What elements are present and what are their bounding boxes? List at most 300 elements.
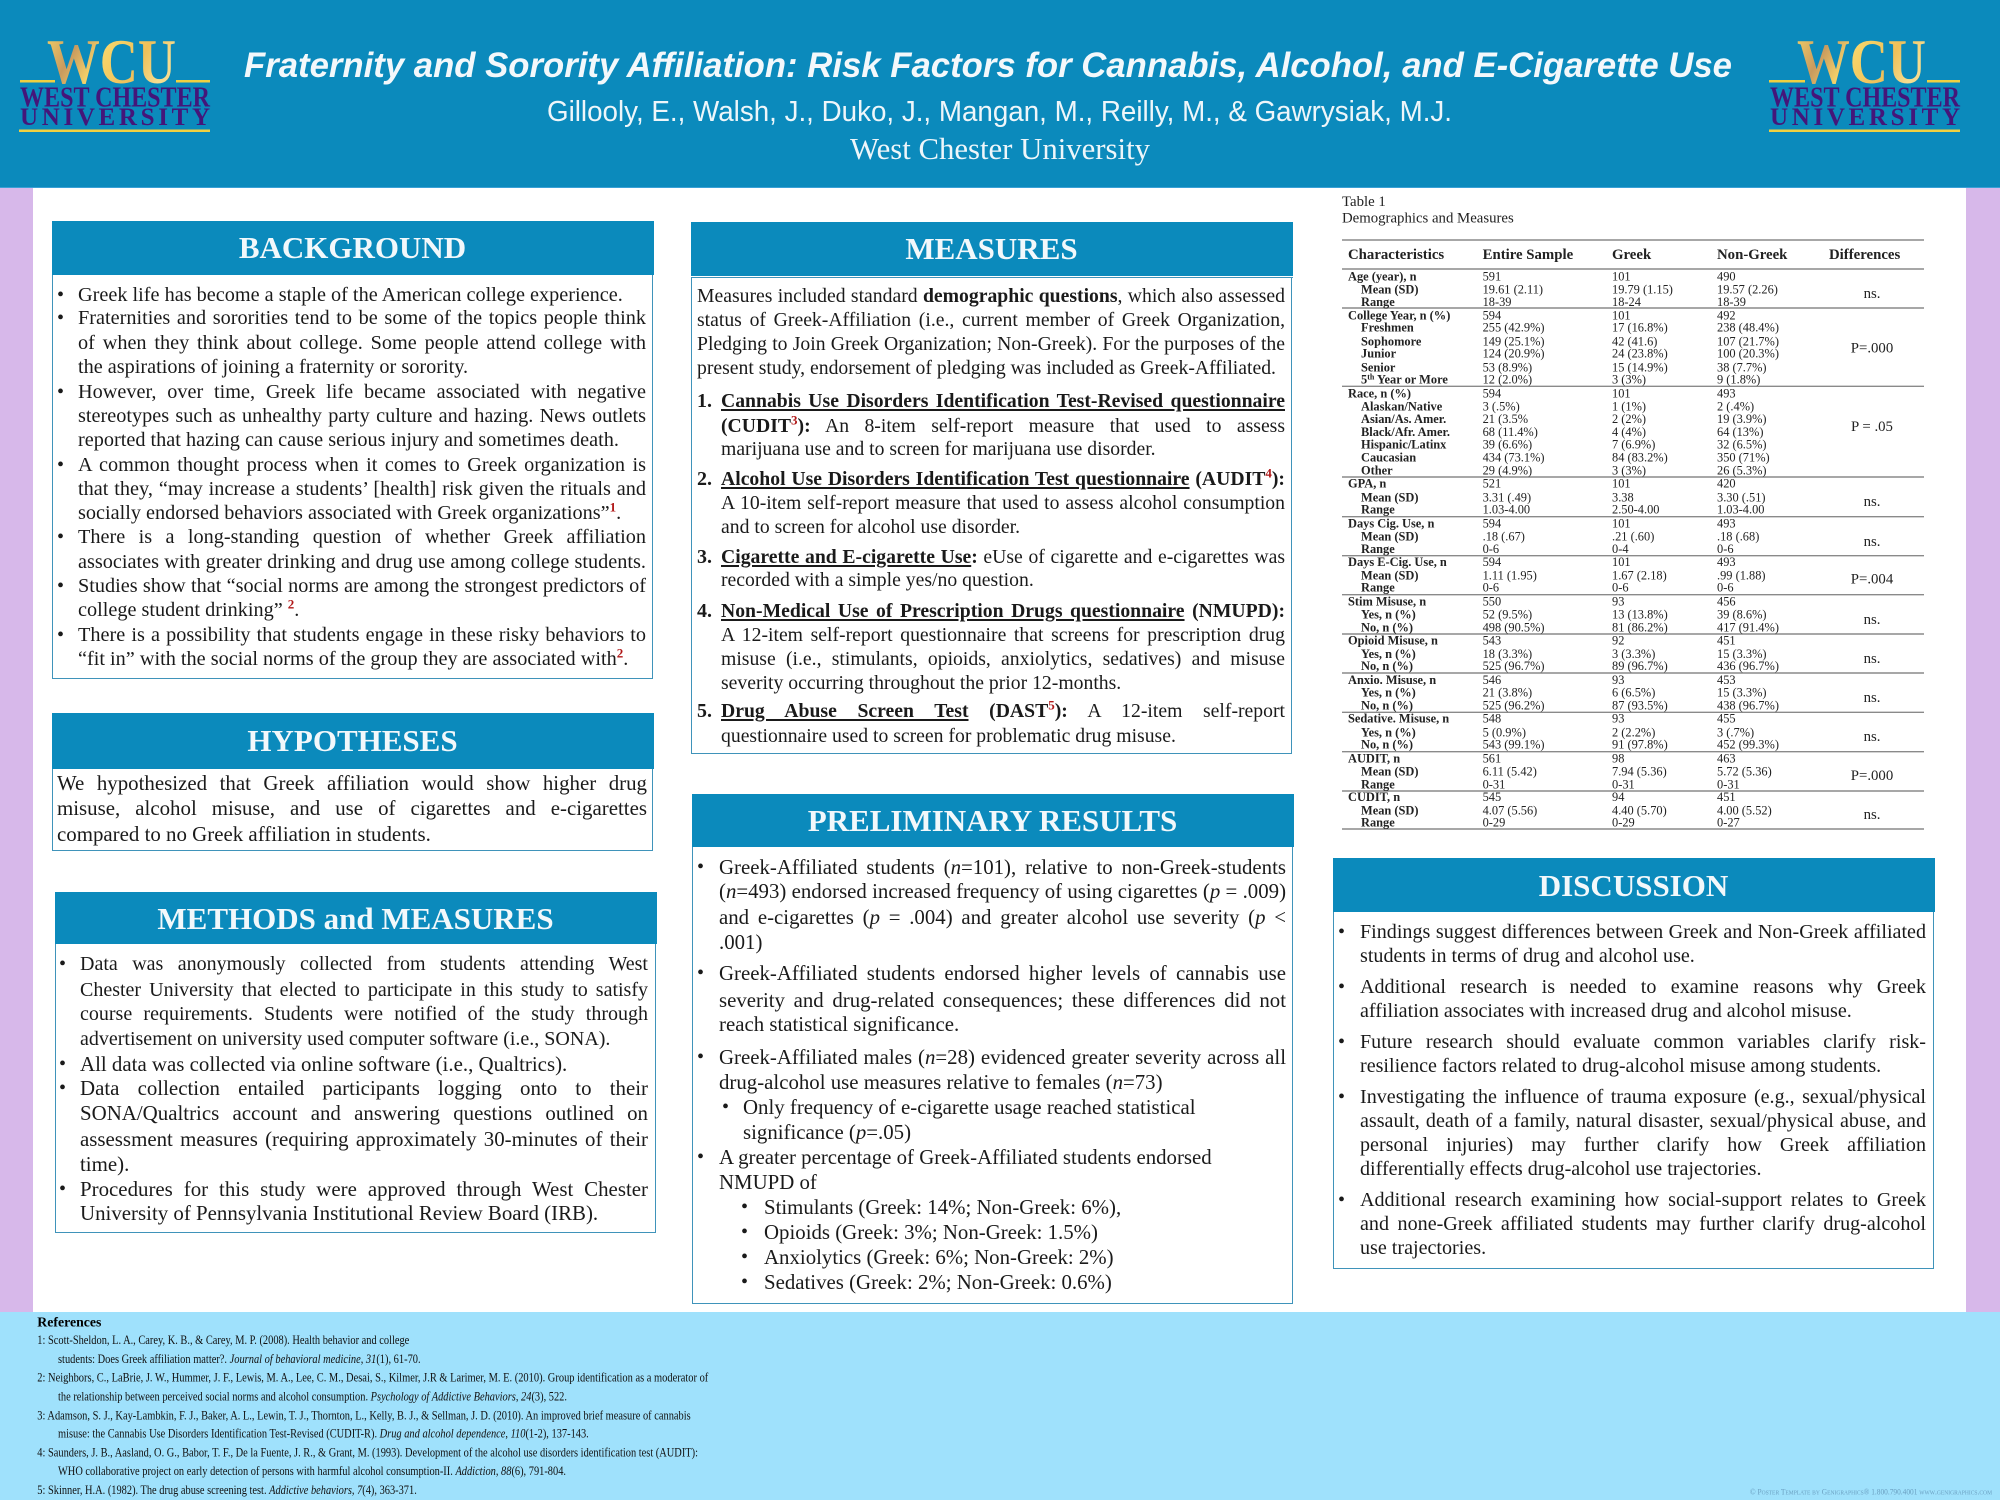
text: methods bullets: All data was collected via online software (i.e., Qualtrics). (80, 1052, 567, 1076)
row group: days cigarette use: 101 (1612, 516, 1631, 530)
table header row: Differences (1829, 247, 1900, 263)
row group: sedative misuse: 2 (2.2%) (1612, 725, 1655, 739)
text: measures numbered list: 5. (697, 700, 712, 722)
heading: hypotheses: HYPOTHESES (247, 722, 458, 758)
row group: stimulant misuse: 498 (90.5%) (1483, 620, 1545, 634)
text: background bullets: the aspirations of joining a fraternity or sorority. (78, 356, 468, 378)
row group: GPA: GPA, n (1348, 476, 1386, 490)
row group: age: Age (year), n (1348, 269, 1417, 283)
text: discussion bullets: Findings suggest differences between Greek and Non-Greek affiliated (1360, 921, 1926, 943)
row group: GPA: 101 (1612, 476, 1631, 490)
text: background bullets: There is a possibility that students engage in these risky behaviors to (78, 624, 646, 646)
text: discussion bullets: • (1338, 1086, 1345, 1108)
reference list: 1: Scott-Sheldon, L. A., Carey, K. B., & Carey, M. P. (2008). Health behavior and college (37, 1333, 410, 1347)
differences column: ns. (1864, 807, 1880, 823)
row group: CUDIT (1348, 790, 1772, 830)
title: Fraternity and Sorority Affiliation: Risk Factors for Cannabis, Alcohol, and E-Cigarette Use (244, 45, 1732, 85)
text: methods bullets (59, 953, 648, 1225)
row group: sedative misuse: Sedative. Misuse, n (1348, 712, 1449, 726)
text: methods bullets: University of Pennsylvania Institutional Review Board (IRB). (80, 1201, 598, 1225)
row group: CUDIT: 94 (1612, 790, 1624, 804)
text: hypotheses: misuse, alcohol misuse, and use of cigarettes and e-cigarettes (57, 796, 647, 820)
row group: race: 64 (13%) (1717, 425, 1763, 439)
text: discussion bullets: assault, death of a family, natural disaster, sexual/physical abuse, and (1360, 1110, 1926, 1132)
text: results bullets: Anxiolytics (Greek: 6%; Non-Greek: 2%) (764, 1245, 1114, 1269)
row group: race: Asian/As. Amer. (1361, 412, 1446, 426)
text: measures numbered list: Cigarette and E-cigarette Use: eUse of cigarette and e-cigarettes was (721, 546, 1285, 568)
header banner (0, 0, 2000, 188)
text: results bullets: • (741, 1196, 748, 1218)
row group: opioid misuse: 18 (3.3%) (1483, 647, 1532, 661)
row group: anxiolytic misuse: 438 (96.7%) (1717, 699, 1779, 713)
row group: days e-cigarette use: Mean (SD) (1361, 569, 1418, 583)
row group: race: 101 (1612, 386, 1631, 400)
text: results bullets: • (697, 1146, 704, 1168)
row group: stimulant misuse: 81 (86.2%) (1612, 620, 1668, 634)
authors: Gillooly, E., Walsh, J., Duko, J., Mangan, M., Reilly, M., & Gawrysiak, M.J. (547, 96, 1452, 128)
row group: sedative misuse (1348, 712, 1779, 751)
row group: opioid misuse: Opioid Misuse, n (1348, 633, 1438, 647)
text: measures intro: Measures included standard demographic questions, which also assessed (697, 285, 1285, 307)
text: background bullets: that they, “may increase a students’ [health] risk given the rituals and (78, 478, 646, 500)
text: measures numbered list: recorded with a simple yes/no question. (721, 569, 1034, 591)
text: discussion bullets: • (1338, 976, 1345, 998)
row group: sedative misuse: 5 (0.9%) (1483, 725, 1526, 739)
row group: CUDIT: 545 (1483, 790, 1501, 804)
row group: college year: Senior (1361, 360, 1396, 374)
row group: race: 594 (1483, 386, 1501, 400)
text: background bullets: socially endorsed behaviors associated with Greek organizations”1. (78, 499, 621, 524)
row group: race: 39 (6.6%) (1483, 438, 1532, 452)
row group: GPA: 1.03-4.00 (1717, 502, 1764, 516)
row group: opioid misuse: 89 (96.7%) (1612, 659, 1668, 673)
row group: age: 490 (1717, 269, 1736, 283)
text: measures numbered list: 1. (697, 390, 712, 412)
text: measures numbered list: Non-Medical Use of Prescription Drugs questionnaire (NMUPD): (721, 600, 1285, 622)
differences column: ns. (1864, 534, 1880, 550)
row group: stimulant misuse: 52 (9.5%) (1483, 607, 1532, 621)
row group: college year: 238 (48.4%) (1717, 321, 1779, 335)
row group: age: 18-24 (1612, 295, 1641, 309)
row group: race: 32 (6.5%) (1717, 438, 1767, 452)
reference list (37, 1333, 709, 1497)
text: measures numbered list: questionnaire used to screen for problematic drug misuse. (721, 725, 1176, 747)
row group: sedative misuse: 543 (99.1%) (1483, 737, 1545, 751)
row group: college year: 492 (1717, 309, 1736, 323)
row group: opioid misuse: 451 (1717, 633, 1736, 647)
text: background bullets: • (57, 526, 64, 548)
text: discussion bullets: Investigating the influence of trauma exposure (e.g., sexual/physical (1360, 1086, 1926, 1108)
reference list: 4: Saunders, J. B., Aasland, O. G., Babor, T. F., De la Fuente, J. R., & Grant, M. (1993). Development of the alcohol use disorders identification test (AUDIT): (37, 1445, 698, 1459)
text: results bullets: (n=493) endorsed increased frequency of using cigarettes (p = .009) (719, 879, 1286, 903)
panel: discussion (1333, 858, 1934, 1269)
row group: days e-cigarette use: 1.67 (2.18) (1612, 569, 1667, 583)
text: methods bullets: advertisement on university used computer software (i.e., SONA). (80, 1028, 610, 1050)
text: results bullets: Opioids (Greek: 3%; Non-Greek: 1.5%) (764, 1220, 1098, 1244)
text: discussion bullets: affiliation associates with increased drug and alcohol misuse. (1360, 1000, 1852, 1022)
references band (0, 1312, 2000, 1500)
row group: anxiolytic misuse: 93 (1612, 673, 1624, 687)
text: background bullets: There is a long-standing question of whether Greek affiliation (78, 526, 646, 548)
row group: race: Hispanic/Latinx (1361, 438, 1447, 452)
row group: race: 84 (83.2%) (1612, 451, 1668, 465)
row group: college year: 101 (1612, 309, 1631, 323)
row group: race: 350 (71%) (1717, 451, 1770, 465)
logo: WCU right: UNIVERSITY (1770, 104, 1960, 131)
text: background bullets: “fit in” with the social norms of the group they are associated with2. (78, 645, 628, 670)
text: hypotheses: compared to no Greek affiliation in students. (57, 822, 431, 846)
differences column: P=.000 (1851, 341, 1893, 357)
row group: race: Alaskan/Native (1361, 399, 1443, 413)
row group: opioid misuse: 15 (3.3%) (1717, 647, 1767, 661)
table header row: Entire Sample (1483, 247, 1574, 263)
row group: AUDIT: Range (1361, 777, 1395, 791)
text: measures numbered list: 2. (697, 468, 712, 490)
text: results bullets: severity and drug-related consequences; these differences did not (719, 988, 1286, 1012)
text: measures intro: Pledging to Join Greek Organization; Non-Greek). For the purposes of the (697, 333, 1285, 355)
table: demographics and measures (1342, 194, 1924, 830)
text: measures numbered list: marijuana use and to screen for marijuana use disorder. (721, 438, 1156, 460)
row group: AUDIT: AUDIT, n (1348, 751, 1400, 765)
row group: sedative misuse: 91 (97.8%) (1612, 737, 1668, 751)
text: background bullets: • (57, 284, 64, 306)
row group: race: Black/Afr. Amer. (1361, 425, 1450, 439)
text: discussion bullets: and none-Greek affiliated students may further clarify drug-alcohol (1360, 1213, 1926, 1235)
row group: college year: Freshmen (1361, 321, 1414, 335)
text: results bullets: • (741, 1221, 748, 1243)
row group: opioid misuse: 525 (96.7%) (1483, 659, 1545, 673)
row group: GPA (1348, 476, 1766, 516)
side band: right purple (1966, 188, 2000, 1312)
row group: days e-cigarette use: 101 (1612, 555, 1631, 569)
row group: age: 19.79 (1.15) (1612, 282, 1673, 296)
row group: days e-cigarette use: 0-6 (1483, 581, 1499, 595)
references heading: References (37, 1314, 102, 1330)
text: measures intro: present study, endorsement of pledging was included as Greek-Affiliated. (697, 357, 1276, 379)
differences column: ns. (1864, 612, 1880, 628)
row group: AUDIT: 0-31 (1483, 777, 1505, 791)
row group: sedative misuse: Yes, n (%) (1361, 725, 1416, 739)
row group: race: Other (1361, 463, 1393, 477)
panel: measures (691, 222, 1292, 754)
text: results bullets: significance (p=.05) (743, 1120, 911, 1144)
row group: college year (1348, 309, 1779, 386)
table header row (1348, 247, 1900, 263)
row group: AUDIT: 5.72 (5.36) (1717, 764, 1772, 778)
row group: college year: 15 (14.9%) (1612, 360, 1668, 374)
row group: anxiolytic misuse (1348, 673, 1779, 713)
logo: WCU left (19, 26, 211, 132)
text: results bullets: • (697, 1046, 704, 1068)
table caption (1342, 194, 1514, 226)
row group: stimulant misuse: 93 (1612, 594, 1624, 608)
row group: age: 591 (1483, 269, 1501, 283)
row group: CUDIT: 451 (1717, 790, 1736, 804)
differences column: ns. (1864, 494, 1880, 510)
text: discussion bullets: students in terms of drug and alcohol use. (1360, 945, 1695, 967)
row group: college year: 124 (20.9%) (1483, 346, 1545, 360)
row group: GPA: 521 (1483, 476, 1501, 490)
row group: college year: 3 (3%) (1612, 372, 1646, 386)
row group: race: 1 (1%) (1612, 399, 1646, 413)
row group: race (1348, 386, 1770, 477)
panel: methods and measures (55, 892, 656, 1233)
text: background bullets: • (57, 575, 64, 597)
row group: stimulant misuse: Yes, n (%) (1361, 607, 1416, 621)
row group: stimulant misuse: Stim Misuse, n (1348, 594, 1426, 608)
logo: WCU left: WEST CHESTER (20, 82, 211, 114)
logo: WCU right: WEST CHESTER (1770, 82, 1961, 114)
text: background bullets: stereotypes such as unhealthy party culture and hazing. News outlets (78, 405, 646, 427)
row group: race: 29 (4.9%) (1483, 463, 1532, 477)
row group: opioid misuse (1348, 633, 1779, 673)
text: results bullets: Stimulants (Greek: 14%; Non-Greek: 6%), (764, 1195, 1121, 1219)
row group: GPA: 3.31 (.49) (1483, 490, 1531, 504)
row group: race: 3 (.5%) (1483, 399, 1520, 413)
side band: left purple (0, 188, 33, 1312)
row group: days cigarette use: Mean (SD) (1361, 529, 1418, 543)
text: results bullets: A greater percentage of Greek-Affiliated students endorsed (719, 1145, 1212, 1169)
text: discussion bullets: Future research should evaluate common variables clarify risk- (1360, 1031, 1926, 1053)
text: discussion bullets: Additional research is needed to examine reasons why Greek (1360, 976, 1926, 998)
text: results bullets: NMUPD of (719, 1170, 817, 1194)
row group: days e-cigarette use: Range (1361, 581, 1395, 595)
text: results bullets: Greek-Affiliated males (n=28) evidenced greater severity across all (719, 1045, 1286, 1069)
text: background bullets: college student drinking” 2. (78, 596, 299, 621)
row group: opioid misuse: No, n (%) (1361, 659, 1413, 673)
heading: discussion: DISCUSSION (1539, 868, 1728, 902)
row group: days cigarette use: Range (1361, 542, 1395, 556)
differences column: P = .05 (1851, 419, 1893, 435)
differences column: ns. (1864, 286, 1880, 302)
row group: CUDIT: CUDIT, n (1348, 790, 1400, 804)
text: measures numbered list: severity occurring throughout the prior 12-months. (721, 672, 1121, 694)
row group: opioid misuse: 3 (3.3%) (1612, 647, 1655, 661)
text: methods bullets: • (59, 1052, 66, 1074)
row group: days cigarette use: .18 (.68) (1717, 529, 1759, 543)
text: methods bullets: assessment measures (requiring approximately 30-minutes of their (80, 1127, 648, 1151)
row group: college year: Sophomore (1361, 334, 1422, 348)
logo: WCU right: WCU (1797, 26, 1926, 97)
table header row: Greek (1612, 247, 1652, 263)
row group: days e-cigarette use: 493 (1717, 555, 1736, 569)
text: methods bullets: • (59, 953, 66, 975)
text: discussion bullets: resilience factors related to drug-alcohol misuse among students. (1360, 1055, 1881, 1077)
text: measures numbered list: 3. (697, 546, 712, 568)
row group: days e-cigarette use: 0-6 (1612, 581, 1629, 595)
row group: days e-cigarette use: .99 (1.88) (1717, 569, 1766, 583)
row group: GPA: 2.50-4.00 (1612, 502, 1660, 516)
text: measures numbered list (697, 390, 1285, 747)
differences column (1851, 286, 1894, 823)
row group: AUDIT: 561 (1483, 751, 1501, 765)
row group: college year: 107 (21.7%) (1717, 334, 1779, 348)
row group: college year: 12 (2.0%) (1483, 372, 1532, 386)
row group: anxiolytic misuse: 21 (3.8%) (1483, 686, 1532, 700)
row group: days cigarette use: 0-6 (1717, 542, 1734, 556)
heading: methods and measures: METHODS and MEASURES (157, 900, 554, 936)
row group: age: 18-39 (1717, 295, 1746, 309)
logo: WCU left: WCU (47, 26, 176, 97)
row group: days cigarette use: .18 (.67) (1483, 529, 1525, 543)
panel: background (52, 221, 653, 679)
text: measures numbered list: Cannabis Use Disorders Identification Test-Revised questionnaire (721, 390, 1285, 412)
row group: age: Range (1361, 295, 1395, 309)
row group: days e-cigarette use: 0-6 (1717, 581, 1734, 595)
row group: CUDIT: 4.07 (5.56) (1483, 804, 1537, 818)
text: background bullets: • (57, 307, 64, 329)
text: discussion bullets: • (1338, 1031, 1345, 1053)
text: background bullets: associates with greater drinking and drug use among college students. (78, 551, 646, 573)
heading: background (52, 220, 654, 274)
heading: preliminary results (692, 794, 1294, 846)
row group: days cigarette use: 493 (1717, 516, 1736, 530)
row group: CUDIT: Range (1361, 816, 1395, 830)
row group: age: Mean (SD) (1361, 282, 1418, 296)
text: results bullets: Only frequency of e-cigarette usage reached statistical (743, 1095, 1196, 1119)
text: background bullets: Greek life has become a staple of the American college experience. (78, 284, 623, 306)
heading: measures: MEASURES (905, 230, 1078, 266)
reference list: WHO collaborative project on early detection of persons with harmful alcohol consumption-II. Addiction, 88(6), 791-804. (58, 1464, 566, 1478)
text: results bullets (697, 854, 1286, 1294)
row group: opioid misuse: 543 (1483, 633, 1501, 647)
row group: sedative misuse: 548 (1483, 712, 1501, 726)
row group: AUDIT (1348, 751, 1772, 791)
row group: age: 19.61 (2.11) (1483, 282, 1543, 296)
heading: measures (690, 222, 1292, 276)
differences column: P=.004 (1851, 572, 1894, 588)
heading: hypotheses (52, 712, 654, 768)
row group: race: 19 (3.9%) (1717, 412, 1767, 426)
heading: background: BACKGROUND (239, 230, 466, 264)
table caption: Table 1 (1342, 194, 1386, 210)
row group: race: 2 (2%) (1612, 412, 1646, 426)
row group: college year: 149 (25.1%) (1483, 334, 1545, 348)
text: measures numbered list: (CUDIT3): An 8-item self-report measure that used to assess (721, 413, 1285, 437)
text: results bullets: • (697, 962, 704, 984)
text: measures numbered list: Alcohol Use Disorders Identification Test questionnaire (AUDIT4): (721, 466, 1285, 490)
row group: college year: Junior (1361, 346, 1397, 360)
row group: stimulant misuse: No, n (%) (1361, 620, 1413, 634)
row group: AUDIT: 98 (1612, 751, 1624, 765)
text: results bullets: • (697, 856, 704, 878)
text: discussion bullets: • (1338, 1189, 1345, 1211)
text: hypotheses: We hypothesized that Greek affiliation would show higher drug (57, 771, 647, 795)
row group: opioid misuse: 436 (96.7%) (1717, 659, 1779, 673)
text: methods bullets: Data was anonymously collected from students attending West (80, 953, 648, 975)
row group: AUDIT: 7.94 (5.36) (1612, 764, 1667, 778)
heading: methods and measures (54, 892, 656, 944)
row group: anxiolytic misuse: 453 (1717, 673, 1736, 687)
text: results bullets: .001) (719, 930, 762, 954)
row group: sedative misuse: No, n (%) (1361, 737, 1413, 751)
row group: college year: 17 (16.8%) (1612, 321, 1668, 335)
row group: CUDIT: 4.00 (5.52) (1717, 804, 1772, 818)
row group: stimulant misuse: 39 (8.6%) (1717, 607, 1767, 621)
row group: anxiolytic misuse: 87 (93.5%) (1612, 699, 1668, 713)
row group: college year: Year or More (1374, 372, 1448, 386)
row group: AUDIT: Mean (SD) (1361, 764, 1418, 778)
differences column: ns. (1864, 729, 1880, 745)
text: measures numbered list: A 10-item self-report measure that used to assess alcohol consumption (721, 492, 1285, 514)
reference list: misuse: the Cannabis Use Disorders Identification Test-Revised (CUDIT-R). Drug and alcohol dependence, 110(1-2), 137-143. (58, 1427, 589, 1441)
text: measures numbered list: Drug Abuse Screen Test (DAST5): A 12-item self-report (721, 698, 1285, 722)
row group: college year: College Year, n (%) (1348, 309, 1450, 323)
text: measures numbered list: misuse (i.e., stimulants, opioids, anxiolytics, sedatives) and misuse (721, 648, 1285, 670)
differences column: ns. (1864, 651, 1880, 667)
heading: discussion (1332, 858, 1934, 912)
row group: race: 68 (11.4%) (1483, 425, 1538, 439)
differences column: ns. (1864, 690, 1880, 706)
row group: stimulant misuse: 417 (91.4%) (1717, 620, 1779, 634)
text: results bullets: and e-cigarettes (p = .004) and greater alcohol use severity (p < (719, 905, 1286, 929)
row group: college year: 100 (20.3%) (1717, 346, 1779, 360)
text: background bullets: of when they think about college. Some people attend college with (78, 332, 646, 354)
text: background bullets: A common thought process when it comes to Greek organization is (78, 454, 646, 476)
row group: stimulant misuse (1348, 594, 1779, 634)
text: background bullets (57, 284, 646, 670)
text: methods bullets: Data collection entailed participants logging onto to their (80, 1076, 648, 1100)
row group: days e-cigarette use: Days E-Cig. Use, n (1348, 555, 1447, 569)
reference list: the relationship between perceived social norms and alcohol consumption. Psychology of Addictive Behaviors, 24(3), 522. (58, 1390, 567, 1404)
text: methods bullets: course requirements. Students were notified of the study through (80, 1003, 648, 1025)
text: hypotheses (57, 771, 647, 846)
row group: GPA: 1.03-4.00 (1483, 502, 1530, 516)
row group: anxiolytic misuse: 15 (3.3%) (1717, 686, 1767, 700)
text: methods bullets: • (59, 1178, 66, 1200)
row group: AUDIT: 6.11 (5.42) (1483, 764, 1537, 778)
row group: race: 3 (3%) (1612, 463, 1646, 477)
row group: college year: 5 (1361, 372, 1367, 386)
affiliation: West Chester University (850, 131, 1150, 166)
row group: college year: 38 (7.7%) (1717, 360, 1767, 374)
row group: college year: th (1367, 372, 1375, 381)
text: discussion bullets: Additional research examining how social-support relates to Greek (1360, 1189, 1926, 1211)
text: results bullets: drug-alcohol use measures relative to females (n=73) (719, 1070, 1163, 1094)
row group: anxiolytic misuse: Yes, n (%) (1361, 686, 1416, 700)
text: discussion bullets (1338, 921, 1926, 1259)
row group: age: 101 (1612, 269, 1631, 283)
differences column: P=.000 (1851, 768, 1893, 784)
row group: days cigarette use: Days Cig. Use, n (1348, 516, 1435, 530)
table caption: Demographics and Measures (1342, 210, 1514, 226)
text: discussion bullets: differentially effects drug-alcohol use trajectories. (1360, 1158, 1762, 1180)
row group: AUDIT: 0-31 (1612, 777, 1635, 791)
reference list: 3: Adamson, S. J., Kay-Lambkin, F. J., Baker, A. L., Lewin, T. J., Thornton, L., Kelly, B. J., & Sellman, J. D. (2010). An improved brief measure of cannabis (37, 1408, 691, 1422)
text: measures numbered list: 4. (697, 600, 712, 622)
row group: stimulant misuse: 13 (13.8%) (1612, 607, 1668, 621)
row group: CUDIT: 0-27 (1717, 816, 1740, 830)
row group: college year: 24 (23.8%) (1612, 346, 1668, 360)
row group: anxiolytic misuse: No, n (%) (1361, 699, 1413, 713)
row group: GPA: 3.30 (.51) (1717, 490, 1766, 504)
reference list: 5: Skinner, H.A. (1982). The drug abuse screening test. Addictive behaviors, 7(4), 363-371. (37, 1483, 417, 1497)
row group: days e-cigarette use (1348, 555, 1766, 595)
row group: sedative misuse: 452 (99.3%) (1717, 737, 1779, 751)
row group: stimulant misuse: 456 (1717, 594, 1736, 608)
row group: race: 434 (73.1%) (1483, 451, 1545, 465)
row group: age: 19.57 (2.26) (1717, 282, 1778, 296)
row group: college year: 255 (42.9%) (1483, 321, 1545, 335)
row group: GPA: 420 (1717, 476, 1736, 490)
row group: anxiolytic misuse: 6 (6.5%) (1612, 686, 1655, 700)
text: results bullets: Greek-Affiliated students (n=101), relative to non-Greek-students (719, 854, 1286, 878)
row group: CUDIT: 0-29 (1612, 816, 1635, 830)
row group: age: 18-39 (1483, 295, 1512, 309)
text: measures intro: status of Greek-Affiliation (i.e., current member of Greek Organization, (697, 309, 1285, 331)
row group: race: 7 (6.9%) (1612, 438, 1655, 452)
text: measures numbered list: A 12-item self-report questionnaire that screens for prescription drug (721, 624, 1285, 646)
